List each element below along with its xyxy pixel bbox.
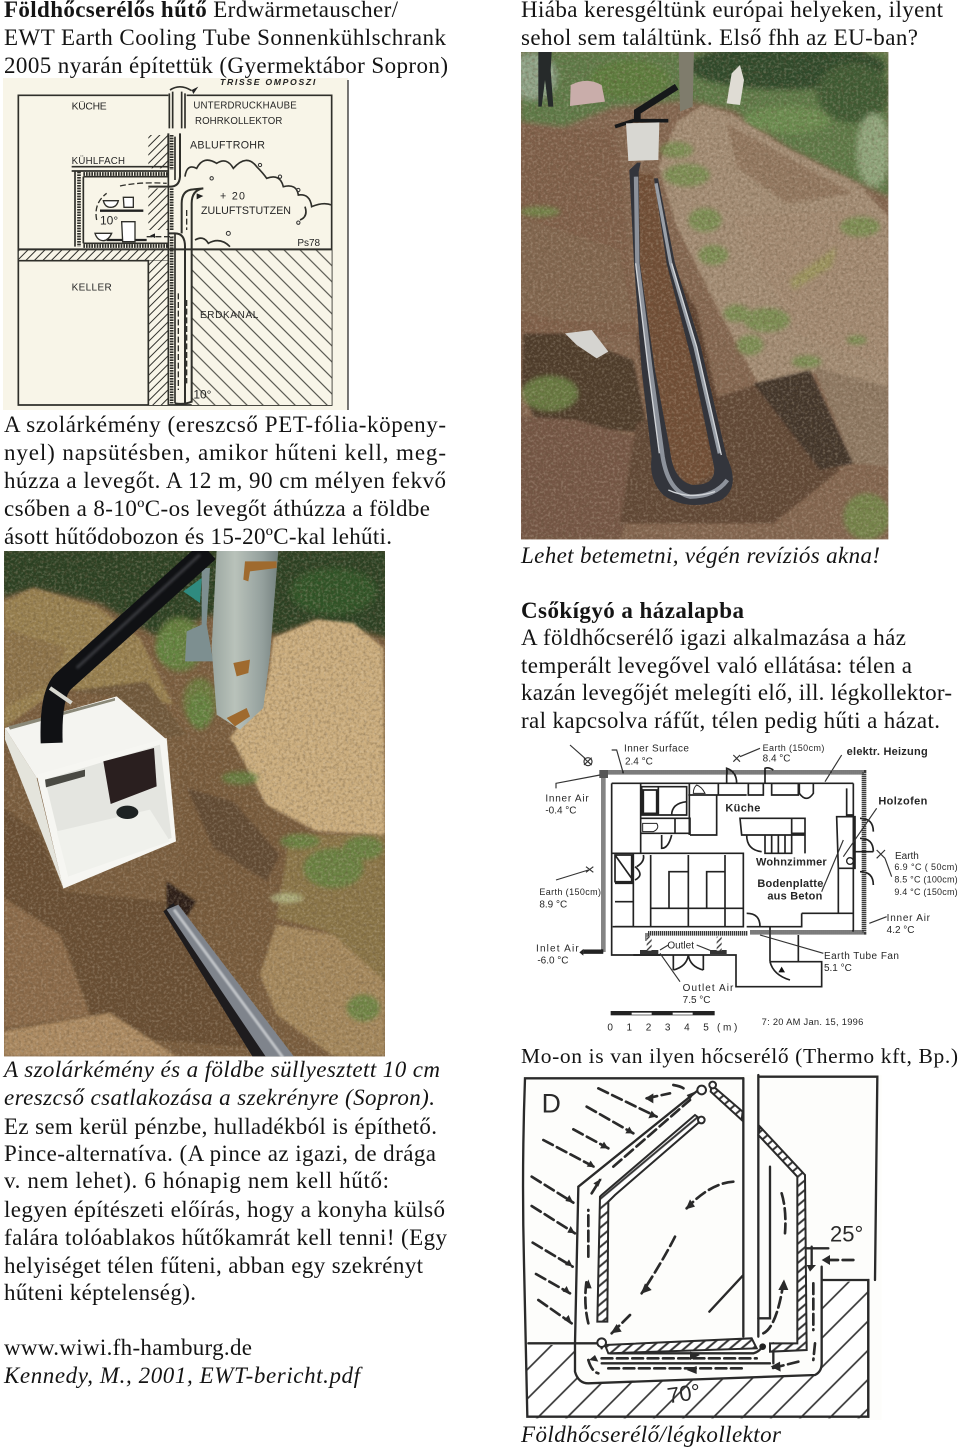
labels: sketch captions	[72, 100, 321, 402]
paragraph: cost and cellar: v. nem lehet). 6 hónapig nem kell hűtő:	[4, 1168, 389, 1193]
label: handwritten note: TRISSE OMPOSZI	[220, 77, 317, 87]
plan labels and temperatures: Outlet	[667, 940, 694, 951]
gravestone-like rock	[570, 81, 605, 106]
diagram: house floor plan with earth tube: Bodenplatte	[757, 878, 823, 890]
plan labels and temperatures: Earth (150cm)	[539, 887, 601, 897]
heading: cooling tube title: 2005 nyarán építettük (Gyermektábor Sopron)	[4, 53, 448, 78]
labels: sketch captions: KÜHLFACH	[72, 156, 125, 167]
text block: pipe snake under the foundation	[521, 598, 952, 733]
text block: solar chimney explanation: csőben a 8-10ºC-os levegőt áthúzza a földbe	[4, 496, 430, 521]
diagram: house floor plan with earth tube: Wohnzimmer	[756, 857, 827, 869]
green leaves	[157, 631, 383, 1021]
handwritten labels: D	[542, 1089, 561, 1119]
text block: top right question	[521, 0, 944, 50]
handwritten labels: 70°	[666, 1379, 702, 1408]
diagram: house floor plan with earth tube: Holzofen	[878, 795, 928, 807]
arrows: sunlight and airflow	[532, 1085, 853, 1373]
stones and plastic	[565, 330, 608, 358]
black duct and elbow	[51, 551, 208, 743]
text block: solar chimney explanation: nyel) napsütésben, amikor hűteni kell, meg-	[4, 440, 446, 465]
black duct	[637, 87, 677, 119]
text block: solar chimney explanation	[4, 412, 446, 549]
diagram: house floor plan with earth tube: Küche	[725, 803, 760, 815]
paragraph: cost and cellar: helyiséget télen fűteni, abban egy szekrényt	[4, 1253, 424, 1278]
photo: box connected to chimney and pipe	[0, 548, 390, 1060]
plan labels and temperatures: Inner Air	[887, 913, 931, 924]
text block: pipe snake under the foundation: ral kapcsolva ráfűt, télen pedig hűti a házat.	[521, 708, 940, 733]
spade	[185, 568, 213, 661]
diagram: kitchen earth tube sketch	[3, 77, 349, 410]
plan labels and temperatures: -0.4 °C	[545, 806, 577, 817]
U-shaped silver pipe	[629, 163, 733, 505]
caption: chimney connection: A szolárkémény és a földbe süllyesztett 10 cm	[2, 1057, 440, 1082]
plan labels and temperatures: 0 1 2 3 4 5 (m)	[607, 1022, 737, 1033]
heading: cooling tube title	[4, 0, 448, 78]
references: www.wiwi.fh-hamburg.de	[4, 1335, 252, 1360]
plan labels and temperatures: 8.9 °C	[539, 900, 567, 911]
labels: sketch captions: ABLUFTROHR	[190, 139, 265, 151]
plan labels and temperatures: 7: 20 AM Jan. 15, 1996	[762, 1017, 863, 1027]
green plants	[520, 142, 890, 540]
text block: pipe snake under the foundation: A földhőcserélő igazi alkalmazása a ház	[521, 625, 906, 650]
references	[3, 1335, 364, 1388]
diagram: house floor plan with earth tube	[536, 743, 958, 1033]
white fridge box	[5, 696, 176, 889]
plan labels and temperatures	[536, 743, 958, 1033]
references: Kennedy, M., 2001, EWT-bericht.pdf	[3, 1363, 364, 1388]
labels: sketch captions: KELLER	[72, 283, 112, 294]
heading: cooling tube title: EWT Earth Cooling Tube Sonnenkühlschrank	[4, 25, 446, 50]
plan labels and temperatures: Inlet Air	[536, 944, 579, 955]
white box	[626, 122, 659, 161]
white sack	[727, 65, 744, 105]
text block: solar chimney explanation: húzza a levegőt. A 12 m, 90 cm mélyen fekvő	[4, 468, 446, 493]
plan labels and temperatures: -6.0 °C	[537, 956, 569, 967]
labels: sketch captions: KÜCHE	[72, 100, 107, 112]
handwritten labels: 25°	[830, 1222, 863, 1247]
labels: sketch captions: 10°	[193, 388, 212, 402]
labels: sketch captions: + 20	[220, 190, 245, 202]
labels: sketch captions: 10°	[100, 214, 118, 228]
person legs	[538, 52, 553, 107]
diagram: house with air collector sketch	[522, 1075, 882, 1420]
hatched collector walls	[597, 1085, 807, 1353]
handwritten labels	[542, 1089, 863, 1408]
text: Thermo kft heading: Mo-on is van ilyen hőcserélő (Thermo kft, Bp.)	[521, 1044, 958, 1068]
paragraph: cost and cellar: hűteni képtelenség).	[4, 1280, 196, 1305]
labels: sketch captions: UNTERDRUCKHAUBE	[193, 100, 297, 111]
paragraph: cost and cellar: legyen építészeti előírás, hogy a konyha külső	[4, 1197, 445, 1222]
subheading: Csőkígyó a házalapba: Csőkígyó a házalapba	[521, 598, 744, 623]
caption: chimney connection	[2, 1057, 440, 1110]
buried grey pipe	[163, 903, 295, 1058]
plan labels and temperatures: 6.9 °C ( 50cm)	[894, 862, 958, 872]
plan labels and temperatures: 2.4 °C	[625, 756, 653, 767]
plan labels and temperatures: 7.5 °C	[683, 995, 711, 1006]
text block: pipe snake under the foundation: kazán levegőjét melegíti elő, ill. légkollektor-	[521, 680, 952, 705]
text block: solar chimney explanation: A szolárkémény (ereszcső PET-fólia-köpeny-	[4, 412, 446, 437]
text block: solar chimney explanation: ásott hűtődobozon és 15-20ºC-kal lehűti.	[4, 524, 392, 549]
caption: chimney connection: ereszcső csatlakozása a szekrényre (Sopron).	[4, 1085, 435, 1110]
photo: U-shaped pipe in trench	[510, 43, 890, 542]
plan labels and temperatures: Inner Surface	[624, 744, 689, 755]
scale bar	[611, 1011, 715, 1015]
plan labels and temperatures: Earth (150cm)	[763, 743, 824, 753]
diagram: house floor plan with earth tube: elektr. Heizung	[847, 746, 928, 758]
paragraph: cost and cellar: falára tolóablakos hűtőkamrát kell tenni! (Egy	[4, 1225, 448, 1250]
plan labels and temperatures: Inner Air	[545, 794, 589, 805]
metal pole	[212, 550, 278, 730]
caption: earth exchanger and air collector: Földhőcserélő/légkollektor	[520, 1422, 782, 1447]
labels: sketch captions: ERDKANAL	[200, 310, 259, 321]
diagram: house floor plan with earth tube: aus Beton	[767, 891, 823, 903]
plan labels and temperatures: 8.4 °C	[763, 754, 791, 765]
paragraph: cost and cellar: Ez sem kerül pénzbe, hulladékból is építhető.	[4, 1114, 437, 1139]
paragraph: cost and cellar	[4, 1114, 448, 1305]
paragraph: cost and cellar: Pince-alternatíva. (A pince az igazi, de drága	[4, 1141, 436, 1166]
text block: pipe snake under the foundation: temperált levegővel való ellátása: télen a	[521, 653, 912, 678]
text block: solar chimney caption and cellar alternative	[2, 1057, 448, 1305]
caption: trench photo: Lehet betemetni, végén revíziós akna!	[520, 543, 880, 568]
plan labels and temperatures: Earth Tube Fan	[824, 951, 899, 962]
labels: sketch captions: Ps78	[297, 238, 321, 249]
text block: top right question: sehol sem találtünk. Első fhh az EU-ban?	[521, 25, 918, 50]
plan labels and temperatures: Earth	[895, 851, 919, 862]
plan labels and temperatures: 8.5 °C (100cm)	[894, 874, 958, 884]
concrete pole	[679, 51, 694, 112]
plan labels and temperatures: 4.2 °C	[887, 925, 915, 936]
labels: sketch captions: ZULUFTSTUTZEN	[201, 205, 291, 217]
plan labels and temperatures: Outlet Air	[683, 983, 734, 994]
plan labels and temperatures: 5.1 °C	[824, 963, 852, 974]
plan labels and temperatures: 9.4 °C (150cm)	[894, 887, 958, 897]
labels: sketch captions: ROHRKOLLEKTOR	[195, 116, 282, 127]
